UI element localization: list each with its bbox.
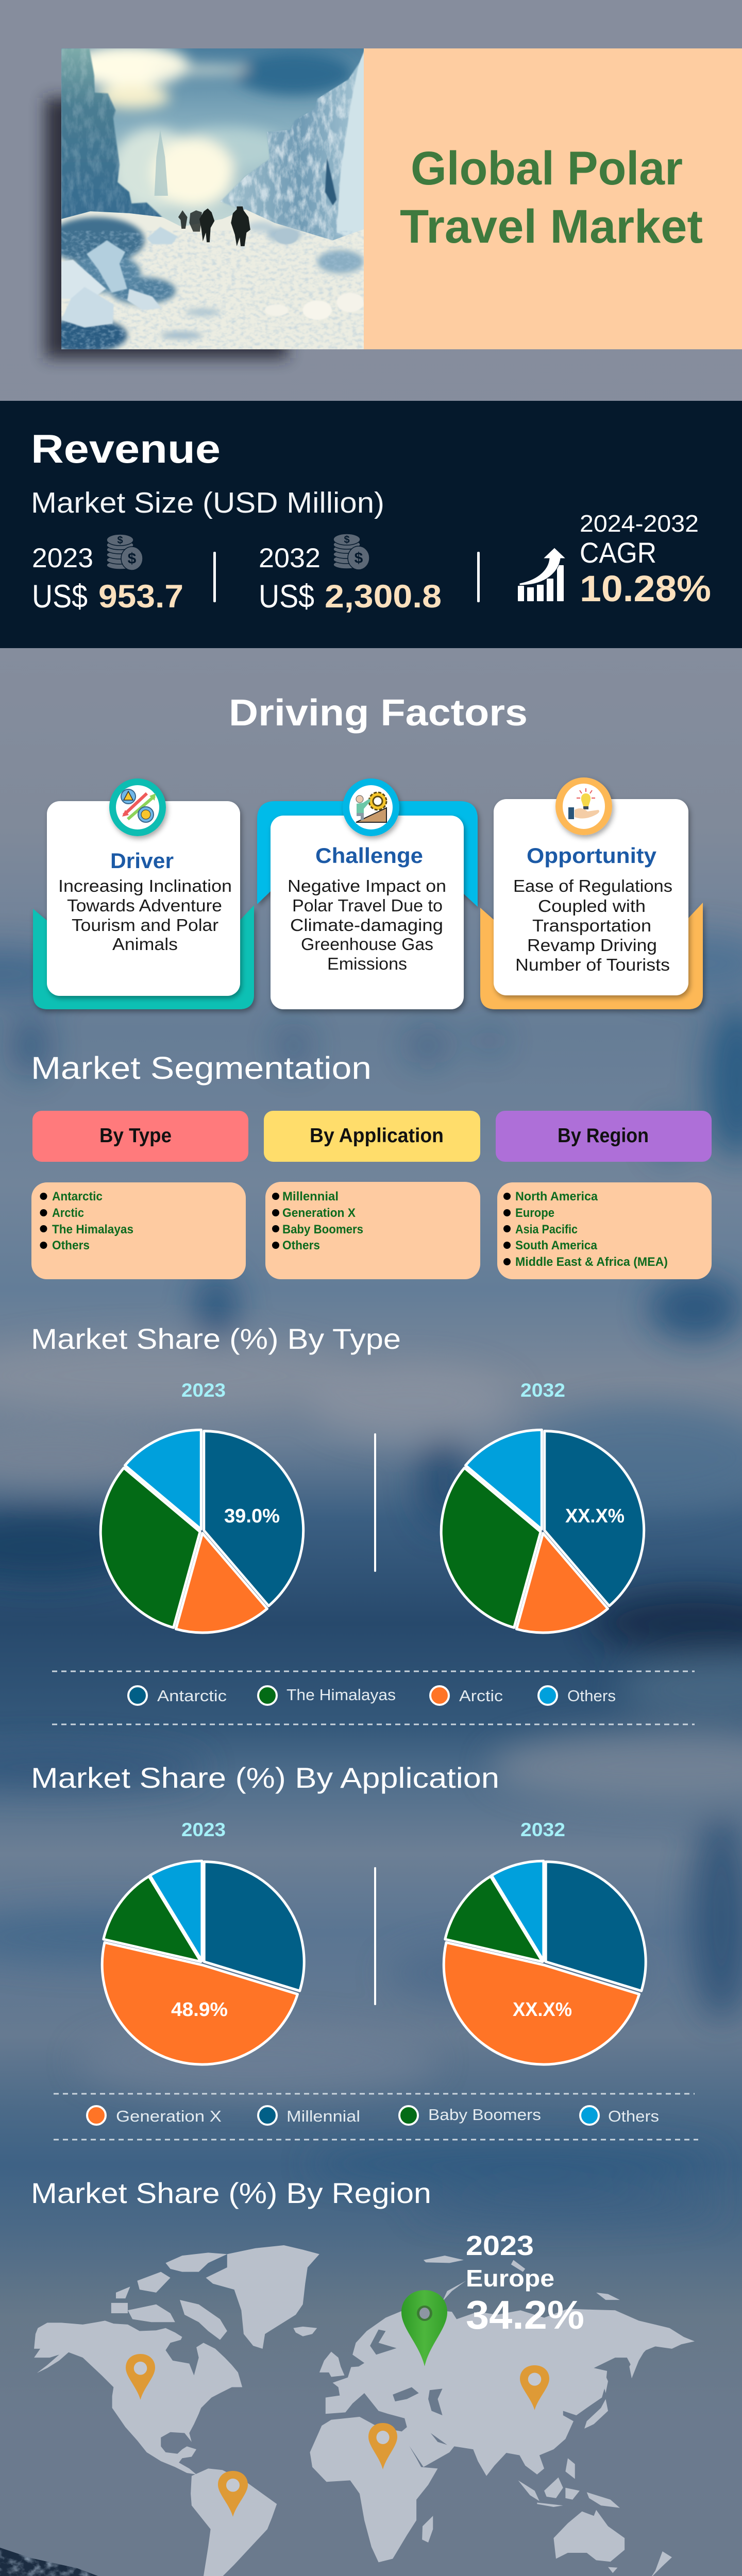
panel: by application: [264, 1111, 480, 1162]
panel: by region: [496, 1111, 712, 1162]
panel: driver: [33, 778, 254, 1009]
list: region segments: North America: [515, 1190, 598, 1204]
list: application segments: Others: [282, 1239, 320, 1252]
opportunity text: Coupled with: [538, 896, 646, 916]
rocky foreground: [0, 2548, 98, 2576]
legend: application: Others: [608, 2107, 659, 2125]
divider: [213, 552, 216, 602]
challenge text: Climate-damaging: [290, 916, 443, 935]
list: type segments: Others: [52, 1239, 90, 1252]
list: region segments: Middle East & Africa (MEA): [515, 1255, 668, 1269]
icon: rising bars with arrow: [518, 548, 566, 601]
2023 value: 953.7: [98, 579, 183, 615]
divider: [374, 1867, 376, 2005]
driver text: Increasing Inclination: [58, 876, 232, 895]
pie chart: type 2032: XX.X%: [565, 1505, 625, 1527]
list: type segments: [31, 1182, 246, 1279]
opportunity text: Transportation: [532, 916, 651, 935]
panel: opportunity: [480, 777, 703, 1009]
title: Global Polar: [411, 142, 683, 195]
heading: market share by type: Market Share (%) By Type: [31, 1323, 401, 1355]
hero shadow: [45, 98, 288, 358]
driver text: Towards Adventure: [67, 896, 222, 915]
challenge text: Emissions: [327, 954, 407, 973]
trekkers: [178, 207, 250, 246]
pin: middle east and africa: [368, 2423, 397, 2469]
icon: coins 2032: [333, 534, 369, 570]
title panel: [364, 48, 742, 349]
list: application segments: Generation X: [282, 1206, 356, 1220]
pin: europe highlighted: [401, 2290, 447, 2366]
title: Travel Market: [400, 200, 703, 253]
year label 2032: 2032: [520, 1819, 565, 1840]
callout: europe 2023: 34.2%: [466, 2292, 584, 2337]
panel: by type: By Type: [99, 1125, 172, 1147]
heading: driving factors: Driving Factors: [229, 692, 528, 734]
left ice cliff: [61, 48, 365, 252]
pie chart: application 2032: [444, 1861, 646, 2064]
icon: challenge: [343, 778, 399, 836]
pie chart: application 2023: [102, 1861, 304, 2064]
2032 value: US$: [259, 579, 314, 615]
legend: application: Generation X: [116, 2107, 222, 2125]
2023 value: [32, 543, 183, 615]
icon: coins 2023: [107, 534, 143, 570]
distant trees: [155, 130, 168, 196]
legend: type: The Himalayas: [286, 1686, 396, 1704]
2032 value: 2,300.8: [325, 579, 442, 615]
panel: challenge: [257, 778, 478, 1009]
2023 value: 2023: [32, 543, 93, 573]
legend: type: [52, 1671, 695, 1724]
driver heading: Driver: [110, 849, 174, 873]
opportunity text: Revamp Driving: [527, 936, 657, 955]
driver text: Tourism and Polar: [72, 916, 218, 935]
challenge text: Polar Travel Due to: [292, 896, 443, 915]
year label 2023: 2023: [181, 1819, 226, 1840]
heading: market segmentation: Market Segmentation: [31, 1050, 372, 1086]
icon: coins 2023: $: [128, 550, 137, 567]
world map: [34, 2245, 695, 2576]
pie chart: application 2032: XX.X%: [513, 1999, 572, 2021]
opportunity text: Ease of Regulations: [513, 876, 672, 895]
pin: south america: [218, 2471, 248, 2517]
challenge text: Negative Impact on: [288, 876, 446, 895]
pie chart: type 2032: [441, 1430, 644, 1633]
cagr: [580, 510, 711, 609]
pin: north america: [126, 2354, 155, 2400]
panel: by type: [32, 1111, 248, 1162]
challenge heading: Challenge: [315, 843, 423, 868]
opportunity text: Number of Tourists: [515, 955, 670, 974]
pie chart: application 2023: 48.9%: [171, 1999, 228, 2021]
icon: coins 2032: $: [344, 534, 350, 546]
cagr: CAGR: [580, 536, 656, 569]
revenue band: [0, 401, 742, 648]
callout: europe 2023: 2023: [466, 2230, 534, 2261]
2023 value: US$: [32, 579, 88, 615]
year label 2023: 2023: [181, 1380, 226, 1401]
list: type segments: Arctic: [52, 1206, 84, 1220]
right ice cliff: [221, 48, 365, 252]
icon: driver: [109, 778, 166, 836]
list: application segments: [265, 1182, 480, 1279]
hero image: polar trekkers in an ice canyon: [42, 44, 365, 353]
callout: europe 2023: [466, 2230, 584, 2337]
list: region segments: [497, 1182, 712, 1279]
icon: coins 2023: $: [117, 535, 123, 546]
opportunity heading: Opportunity: [527, 843, 657, 868]
divider: [374, 1433, 376, 1572]
snow ground: [61, 209, 365, 349]
legend: application: Millennial: [286, 2107, 360, 2125]
list: region segments: Europe: [515, 1206, 554, 1220]
panel: by application: By Application: [310, 1125, 444, 1147]
list: type segments: The Himalayas: [52, 1223, 133, 1236]
icon: coins 2032: $: [355, 550, 363, 567]
legend: application: [54, 2094, 698, 2140]
list: region segments: South America: [515, 1239, 598, 1252]
icon: opportunity: [555, 777, 612, 835]
heading: market share by region: Market Share (%) By Region: [31, 2177, 431, 2209]
list: application segments: Millennial: [282, 1190, 339, 1204]
legend: type: Antarctic: [157, 1687, 227, 1705]
legend: type: Others: [567, 1687, 616, 1705]
legend: type: Arctic: [459, 1687, 503, 1705]
pie chart: type 2023: 39.0%: [224, 1505, 280, 1527]
list: type segments: Antarctic: [52, 1190, 103, 1204]
2032 value: 2032: [259, 543, 321, 573]
list: region segments: Asia Pacific: [515, 1223, 578, 1236]
2032 value: [259, 543, 442, 615]
legend: application: Baby Boomers: [428, 2106, 541, 2124]
pie chart: type 2023: [100, 1430, 303, 1633]
list: application segments: Baby Boomers: [282, 1223, 363, 1236]
heading: market share by application: Market Share (%) By Application: [31, 1761, 499, 1794]
pin: asia pacific: [520, 2365, 549, 2410]
cagr: 2024-2032: [580, 510, 699, 537]
cagr: 10.28%: [580, 569, 711, 609]
challenge text: Greenhouse Gas: [301, 935, 433, 954]
driver text: Animals: [112, 935, 178, 954]
year label 2032: 2032: [520, 1380, 565, 1401]
divider: [477, 552, 480, 602]
heading: revenue: Revenue: [31, 426, 221, 471]
callout: europe 2023: Europe: [466, 2265, 554, 2292]
panel: by region: By Region: [558, 1125, 649, 1147]
market size label: Market Size (USD Million): [31, 486, 384, 519]
